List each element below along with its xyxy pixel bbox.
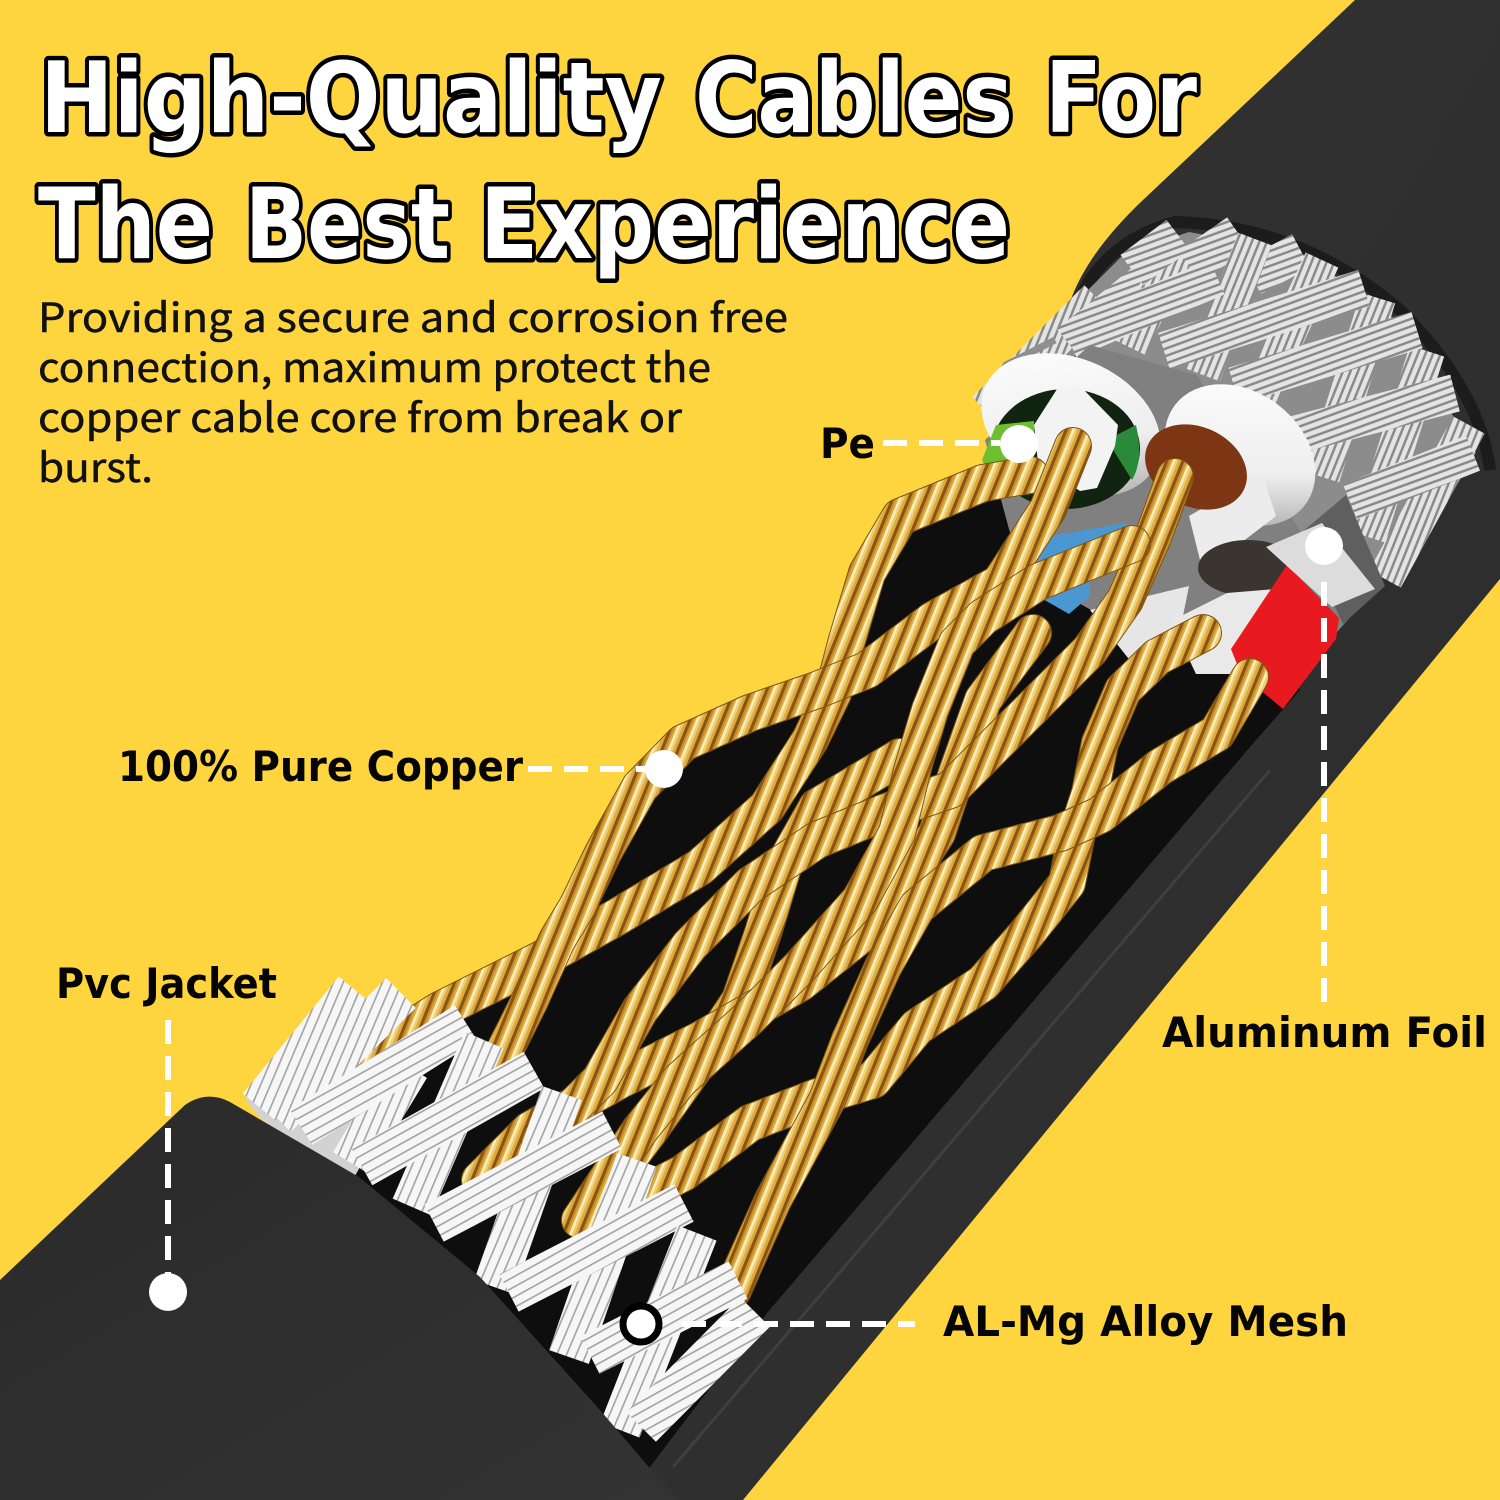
dark foil patch	[1301, 495, 1385, 624]
callout: AL-Mg Alloy Mesh: AL-Mg Alloy Mesh	[943, 1297, 1348, 1346]
callout: AL-Mg Alloy Mesh	[623, 1297, 1348, 1346]
dark gap	[1198, 540, 1298, 596]
black cable interior	[270, 450, 1300, 1480]
callout: Pe	[820, 419, 1038, 468]
upper metal mesh bands	[985, 233, 1473, 579]
jacket opening rim	[1083, 222, 1490, 470]
copper strands	[360, 446, 1250, 1290]
description text	[38, 286, 788, 494]
callout: Pvc Jacket: Pvc Jacket	[56, 959, 277, 1008]
foil over red wire	[1266, 523, 1375, 607]
foil ring: brown wire	[1137, 355, 1343, 555]
red wire	[1231, 565, 1339, 709]
frayed mesh edge	[985, 340, 1055, 410]
title: Best	[245, 168, 450, 282]
title: Cables	[695, 42, 1013, 156]
white core: red wire	[1171, 589, 1276, 674]
blue wire	[1020, 523, 1139, 614]
title: For	[1045, 42, 1198, 156]
title: The	[38, 168, 213, 282]
silver backing under frayed mesh	[245, 1020, 430, 1185]
green wire opening	[992, 389, 1140, 509]
green wire jacket light	[982, 421, 1034, 477]
description text: copper cable core from break or	[38, 386, 683, 444]
title: High-Quality	[40, 42, 662, 156]
white core: brown wire	[1189, 474, 1276, 572]
green wire jacket shade	[1107, 425, 1139, 480]
callout: Aluminum Foil	[1162, 527, 1487, 1057]
callout: Aluminum Foil: Aluminum Foil	[1162, 1008, 1487, 1057]
description text: Providing a secure and corrosion free	[38, 286, 788, 344]
callout: 100% Pure Copper: 100% Pure Copper	[118, 742, 523, 791]
near PVC jacket	[0, 1097, 680, 1500]
description text: burst.	[38, 436, 153, 494]
lower alloy mesh bands	[259, 990, 755, 1430]
callout: Pvc Jacket	[56, 959, 277, 1311]
brown wire	[1131, 408, 1261, 526]
foil ring: green wire	[958, 325, 1184, 525]
callout: Pe: Pe	[820, 419, 875, 468]
upper metal mesh backing	[985, 232, 1476, 586]
wall crease	[673, 770, 1270, 1467]
far jacket and lower wall	[600, 0, 1500, 1500]
title: Experience	[480, 168, 1010, 282]
white core: green wire	[1034, 386, 1118, 491]
description text: connection, maximum protect the	[38, 336, 711, 394]
grey foil under wire heads	[985, 345, 1375, 660]
white core: blue wire	[1090, 586, 1189, 663]
title	[38, 42, 1198, 282]
